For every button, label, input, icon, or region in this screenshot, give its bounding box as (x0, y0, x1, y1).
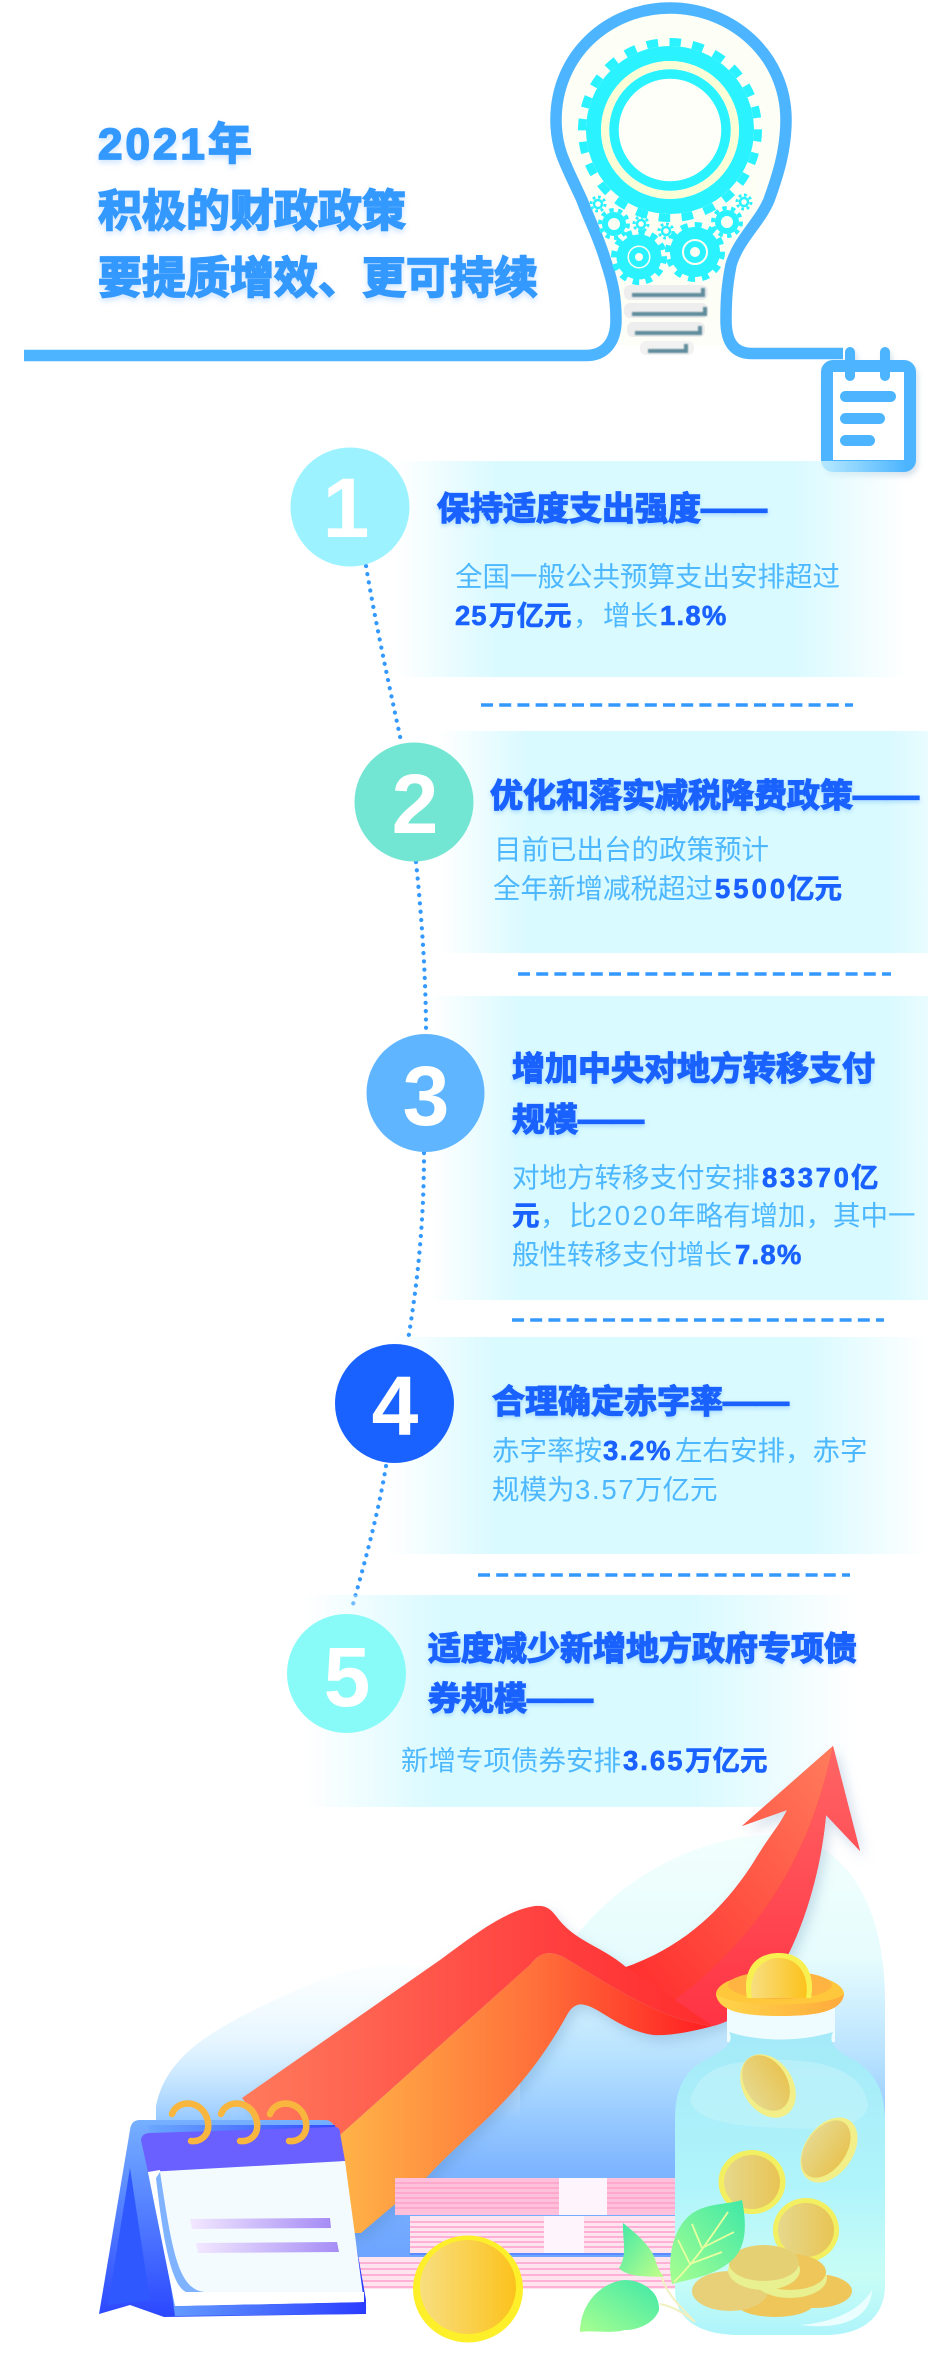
title (98, 120, 538, 303)
item 4: 规模为 (492, 1474, 574, 1505)
item 3: 7.8% (735, 1239, 802, 1270)
arrow upper band (242, 1746, 860, 2170)
body text: 万亿元 (685, 1745, 768, 1776)
item 1 (290, 448, 906, 677)
body text: 新增专项债券安排 (401, 1745, 621, 1776)
small leaf (619, 2223, 664, 2277)
coin on lid (746, 1953, 812, 1998)
item 4: 万亿元 (635, 1474, 718, 1505)
title: 2021年 (98, 120, 252, 169)
title: 要提质增效、更可持续 (98, 254, 538, 303)
body text: 目前已出台的政策预计 (494, 834, 769, 865)
item 4 (335, 1337, 928, 1554)
leaf stems (660, 2278, 695, 2322)
divider 4 (478, 1573, 850, 1577)
item 3: 元 (512, 1200, 540, 1231)
number: 1 (323, 461, 369, 555)
item 3: 年略有增加，其中一 (668, 1200, 916, 1231)
lightbulb illustration (24, 8, 843, 356)
heading: 保持适度支出强度—— (437, 490, 767, 527)
item 1: 1.8% (660, 600, 727, 631)
item 1: 万亿元 (489, 600, 572, 631)
number circle (366, 1034, 484, 1152)
heading: 优化和落实减税降费政策—— (490, 777, 919, 814)
calendar rings (172, 2104, 306, 2141)
item 2: 亿元 (787, 873, 842, 904)
item 5 (287, 1595, 857, 1807)
number: 5 (324, 1630, 370, 1724)
title: 积极的财政政策 (98, 187, 406, 236)
item 3: ， (540, 1200, 568, 1231)
timeline dotted line (352, 566, 426, 1608)
panel background (430, 996, 928, 1300)
calendar page (148, 2161, 364, 2306)
bottom stack (329, 2257, 675, 2289)
coins in jar (692, 2044, 869, 2317)
icon: notepad (827, 352, 910, 466)
body text: 赤字率按 (492, 1435, 602, 1466)
number: 4 (372, 1359, 419, 1453)
item 3: 2020 (597, 1200, 668, 1231)
item 3 (366, 996, 928, 1300)
body text: 83370 (762, 1162, 851, 1193)
body text: 3.2% (603, 1435, 672, 1466)
leaves (580, 2200, 745, 2332)
jar lid (716, 1972, 844, 2016)
stacks of money (329, 2178, 675, 2289)
item 2: 全年新增减税超过 (493, 873, 713, 904)
divider 2 (518, 972, 891, 976)
item 3: 规模—— (512, 1101, 644, 1138)
calendar text bars (190, 2218, 331, 2229)
main gear (582, 42, 758, 218)
bulb inner glow (556, 8, 786, 345)
calendar stand (99, 2120, 366, 2317)
panel background (396, 461, 906, 677)
calendar header (141, 2127, 345, 2172)
item 2 (354, 731, 928, 953)
item 3: 般性转移支付增长 (512, 1239, 732, 1270)
panel background (303, 1595, 856, 1807)
number circle (290, 448, 410, 566)
panel background (439, 731, 928, 953)
number circle (287, 1614, 406, 1733)
body text: 亿 (851, 1162, 878, 1193)
number circle (354, 742, 474, 862)
heading: 增加中央对地方转移支付 (512, 1050, 875, 1087)
arrow head left facet (626, 1746, 833, 2000)
jar water highlight (690, 2060, 868, 2129)
calendar (99, 2104, 366, 2317)
heading: 合理确定赤字率—— (492, 1383, 789, 1420)
item 5: 券规模—— (428, 1680, 593, 1717)
bulb outline and base line (24, 8, 843, 356)
body text: 全国一般公共预算支出安排超过 (455, 561, 840, 592)
notepad lines (840, 391, 896, 446)
divider 3 (512, 1318, 884, 1322)
divider 1 (481, 703, 853, 707)
body text: 对地方转移支付安排 (512, 1162, 760, 1193)
bulb screw (624, 285, 708, 355)
notepad rings (850, 352, 885, 376)
body text: 3.65 (623, 1745, 685, 1776)
item 3: 比 (569, 1200, 596, 1231)
notepad body (827, 366, 910, 466)
arrow (242, 1746, 860, 2233)
big leaf (670, 2200, 745, 2284)
top stack (395, 2178, 675, 2215)
lower leaf (580, 2280, 659, 2332)
small gears (591, 195, 751, 282)
middle stack (410, 2216, 675, 2254)
big gold coin (413, 2236, 523, 2342)
jar highlight bottom (800, 2290, 872, 2326)
item 1: 25 (455, 600, 488, 631)
heading: 适度减少新增地方政府专项债 (428, 1630, 857, 1667)
panel background (388, 1337, 928, 1554)
bottom illustration (99, 1746, 885, 2342)
number circle (335, 1344, 454, 1463)
item 2: 5500 (715, 873, 788, 904)
background hills (156, 1835, 885, 2257)
glass jar (675, 1953, 885, 2335)
number: 2 (392, 757, 438, 851)
arrow orange lower band (300, 1953, 713, 2233)
item 1: ， (573, 600, 600, 631)
arrow head right facet (675, 1746, 860, 2026)
number: 3 (403, 1049, 449, 1143)
item 1: 增长 (603, 600, 658, 631)
body text: 左右安排，赤字 (675, 1435, 868, 1466)
item 4: 3.57 (575, 1474, 635, 1505)
jar neck (727, 2008, 835, 2042)
jar body (675, 2032, 885, 2335)
